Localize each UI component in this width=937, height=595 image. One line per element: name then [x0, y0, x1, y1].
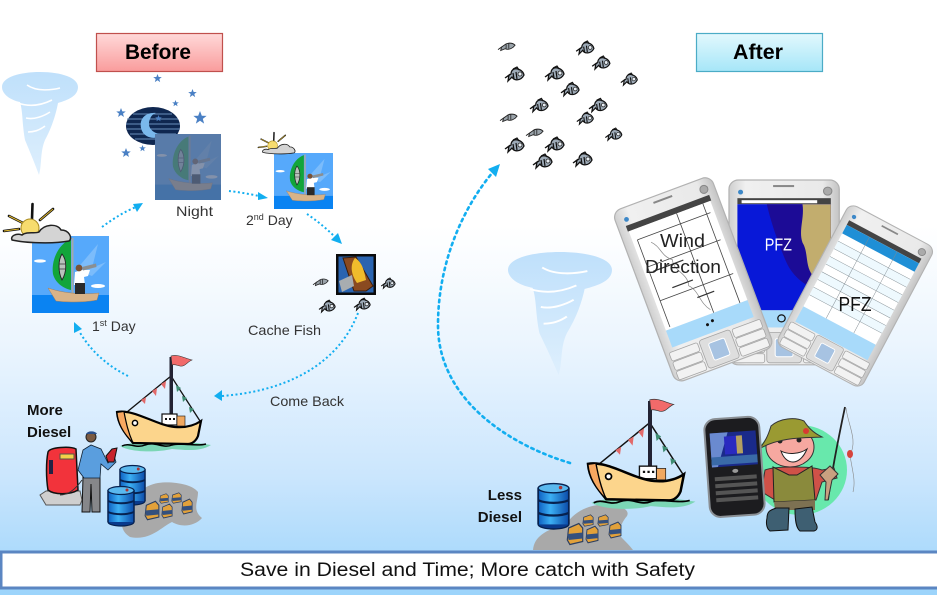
- label: PFZ on table: PFZ: [838, 294, 872, 316]
- label: 2nd Day: 2: [246, 212, 254, 228]
- heading: After: After: [733, 41, 783, 64]
- icon: smartphone: [704, 416, 765, 518]
- picture: night sailboat: [155, 134, 221, 200]
- label: 1st Day: st: [100, 318, 107, 328]
- heading: After: [696, 34, 822, 72]
- arrow: second day to catch: [307, 214, 342, 244]
- icon: fishing boat right: [588, 399, 695, 509]
- panel: before: [2, 34, 395, 538]
- icons: fish near catch: [313, 278, 395, 312]
- label: Cache Fish: Cache Fish: [248, 322, 321, 338]
- heading: Before: [96, 34, 222, 72]
- icon: moon and stars: [116, 74, 207, 157]
- picture: catching fish: [336, 254, 376, 295]
- label: Less Diesel: Less: [488, 487, 522, 504]
- phone: wind direction: [612, 175, 774, 383]
- label: 2nd Day: Day: [264, 212, 293, 228]
- icon: oil spill and cans left: [122, 482, 202, 538]
- label: 1st Day: 1: [92, 318, 100, 334]
- icon: sun and cloud second day: [258, 133, 295, 154]
- picture: second day sailboat: [274, 153, 333, 209]
- label: More Diesel: More: [27, 402, 63, 419]
- label: Less Diesel: Diesel: [478, 509, 522, 526]
- label: Night: Night: [176, 203, 213, 219]
- picture: first day sailboat: [32, 236, 109, 313]
- icon: sun and cloud first day: [4, 204, 71, 243]
- label: PFZ on map: PFZ: [765, 235, 792, 255]
- arrow: boat to first day: [74, 322, 128, 376]
- arrow: night to second day: [229, 191, 268, 200]
- label: Wind Direction: Wind: [660, 231, 705, 251]
- label: Come Back: Come Back: [270, 393, 345, 409]
- icon: barrels left: [108, 466, 145, 526]
- label: 1st Day: Day: [107, 318, 136, 334]
- icon: fuel pump attendant: [40, 431, 117, 512]
- icon: oil spill and cans right: [533, 505, 633, 550]
- icons: school of fish: [498, 41, 637, 168]
- arrow: boat to fish school: [438, 164, 570, 463]
- phone: PFZ table: [775, 203, 935, 389]
- caption bar: Save in Diesel and Time; More catch with Safety: [240, 560, 696, 581]
- label: Wind Direction: Direction: [645, 257, 721, 277]
- label: More Diesel: Diesel: [27, 424, 71, 441]
- label: 2nd Day: nd: [254, 212, 264, 222]
- icon: tornado left: [2, 72, 78, 175]
- arrow: come back: [214, 313, 358, 401]
- arrow: first day to night: [102, 203, 143, 227]
- panel: after: [438, 34, 935, 550]
- icon: tornado right: [508, 252, 612, 375]
- icon: fishing boat left: [117, 355, 211, 451]
- caption bar: [1, 552, 937, 588]
- icon: fisherman: [753, 407, 854, 531]
- heading: Before: Before: [125, 41, 191, 64]
- icon: barrel right: [538, 484, 569, 529]
- phone: PFZ map: [729, 180, 839, 365]
